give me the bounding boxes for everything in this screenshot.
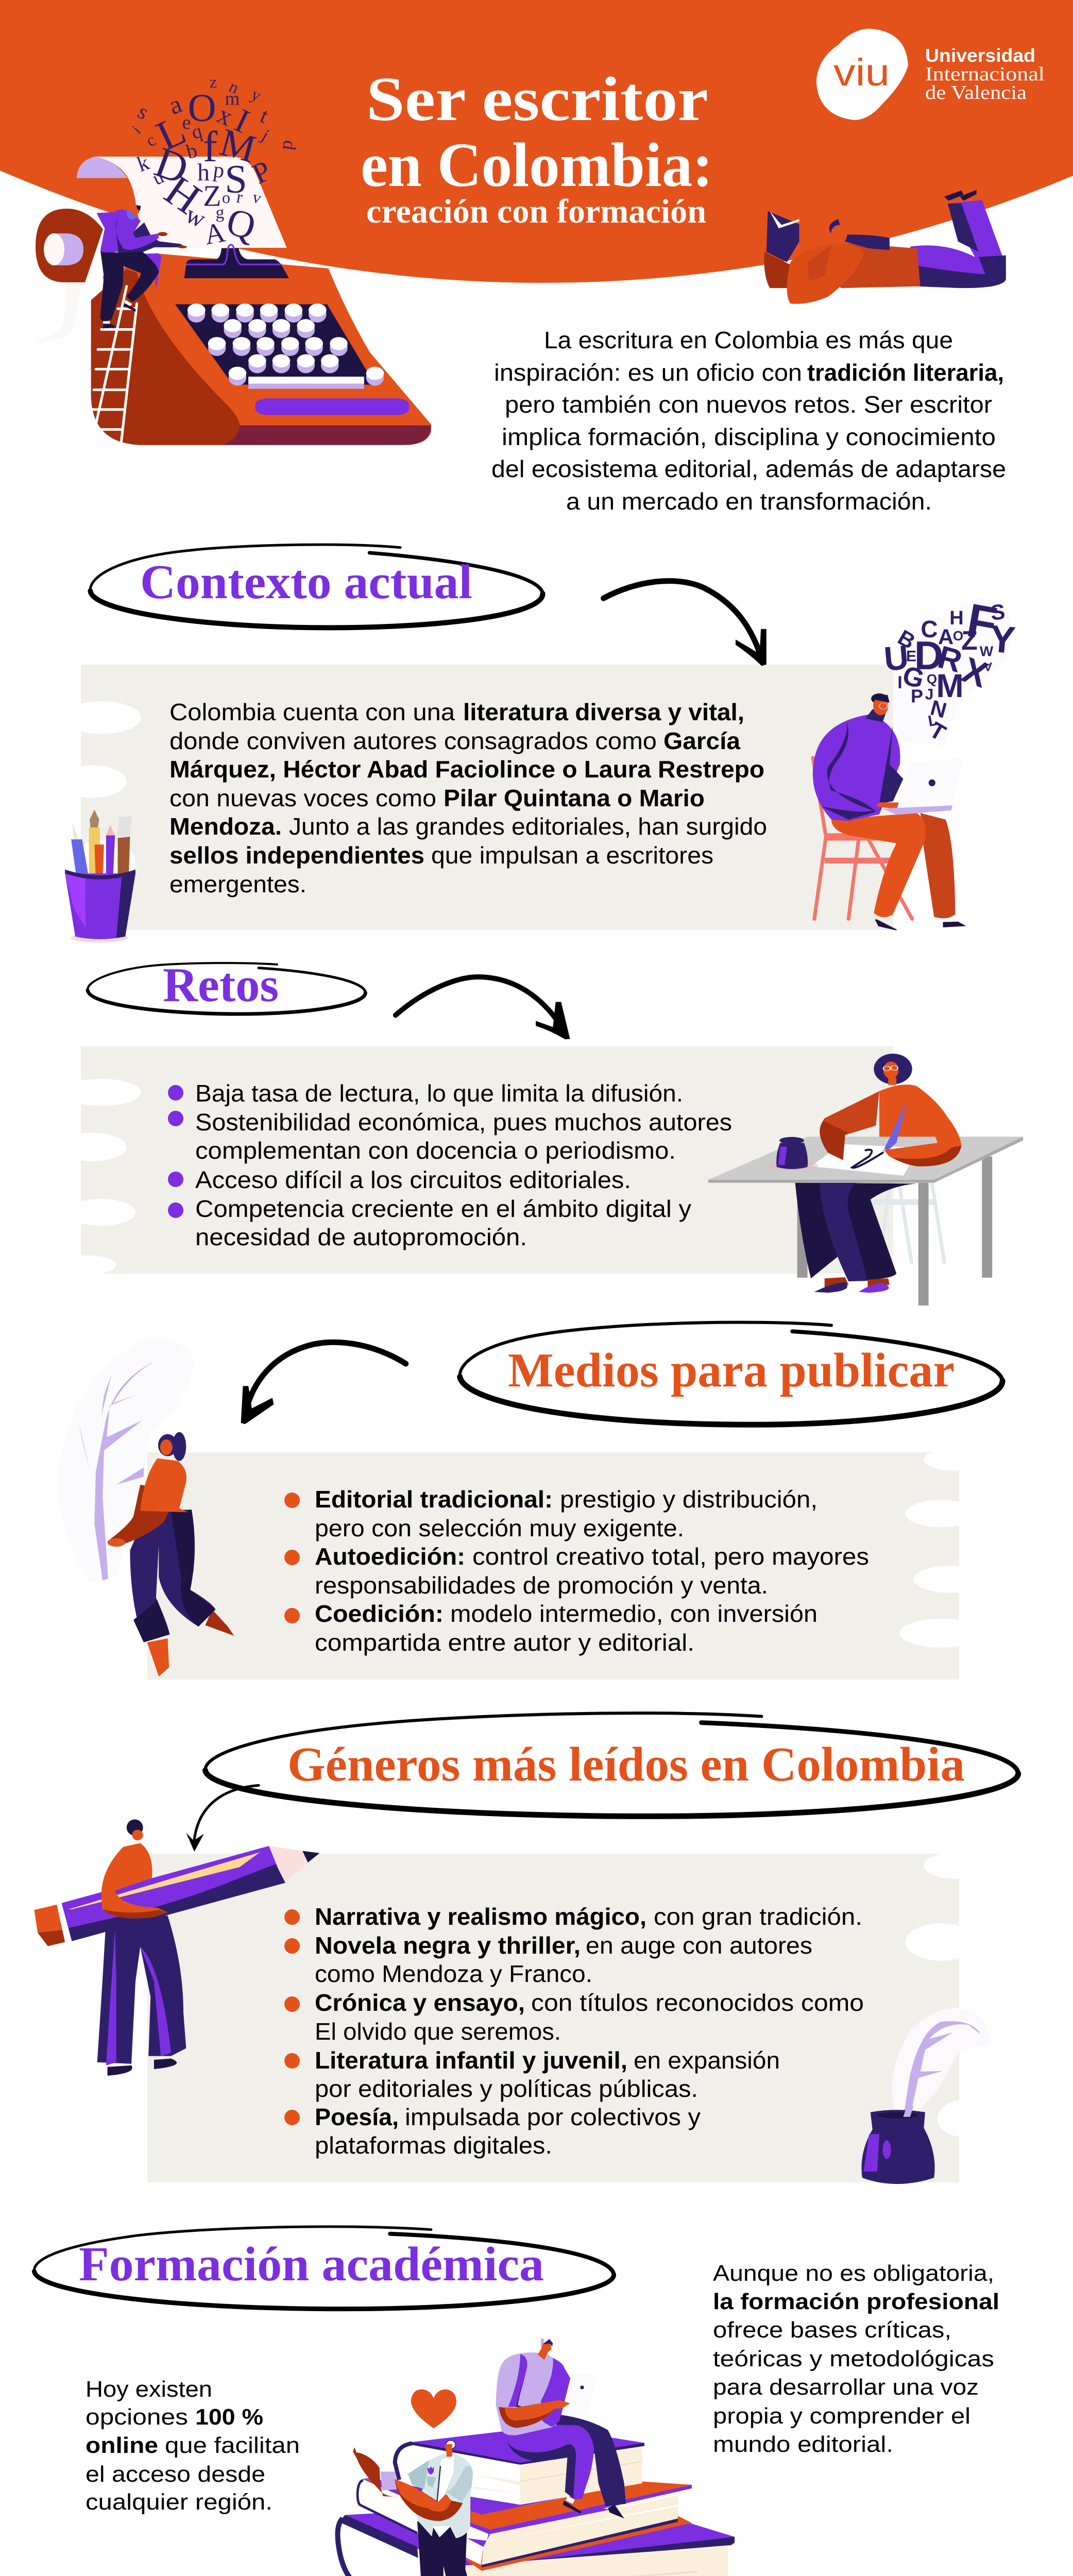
intro text: del ecosistema editorial, además de adaptarse	[491, 455, 1006, 482]
title	[361, 64, 713, 230]
text block: formación profesional: Aunque no es obligatoria,	[713, 2261, 994, 2286]
illustration: letters around laptop: E	[906, 648, 916, 665]
text block: contexto: sellos independientes	[169, 842, 424, 869]
illustration: letters around laptop: F	[963, 594, 1001, 651]
bullet list: géneros: Poesía,	[315, 2104, 399, 2130]
text block: contexto: donde conviven autores consagrados como	[169, 727, 657, 754]
illustration: letters around laptop: S	[990, 599, 1006, 625]
icon: heart	[411, 2389, 456, 2428]
text block: contexto: Pilar Quintana o Mario	[444, 785, 705, 811]
text block: formación profesional: propia y comprender el	[713, 2403, 970, 2429]
illustration: flying letters: w	[181, 199, 210, 233]
illustration: flying letters: y	[248, 85, 264, 106]
heading: medios para publicar: Medios para publicar	[508, 1344, 955, 1397]
illustration: letters around laptop: I	[897, 673, 902, 692]
logo: Universidad	[925, 45, 1035, 66]
illustration: letters around laptop: D	[914, 633, 943, 678]
bullet list: medios: modelo intermedio, con inversión	[450, 1600, 817, 1627]
bullet list: medios: responsabilidades de promoción y venta.	[315, 1572, 768, 1599]
intro text: a un mercado en transformación.	[566, 488, 932, 515]
illustration: flying letters: i	[129, 122, 144, 138]
bullet list: medios: pero con selección muy exigente.	[315, 1515, 684, 1541]
bullet list: retos: Baja tasa de lectura, lo que limita la difusión.	[195, 1080, 683, 1107]
bullet list: géneros: El olvido que seremos.	[315, 2018, 561, 2045]
text block: formación profesional: para desarrollar una voz	[713, 2375, 979, 2400]
roller	[36, 209, 103, 282]
illustration: flying letters: v	[251, 188, 263, 207]
text block: contexto: Colombia cuenta con una	[169, 699, 455, 725]
illustration: flying letters: f	[203, 123, 218, 171]
illustration: flying letters: L	[149, 106, 193, 160]
text block: contexto: García	[663, 727, 740, 754]
illustration: man with laptop	[813, 598, 1013, 930]
illustration: letters around laptop: P	[911, 685, 923, 707]
bullet list: retos: necesidad de autopromoción.	[195, 1224, 527, 1250]
title: Ser escritor	[366, 64, 708, 134]
illustration: flying letters: n	[226, 77, 242, 98]
text block: 100% online: 100 %	[195, 2404, 263, 2430]
logo: viu	[833, 51, 890, 94]
arrow: medios	[241, 1342, 406, 1424]
heading: géneros: Géneros más leídos en Colombia	[287, 1738, 965, 1791]
bullet list: medios	[284, 1486, 869, 1656]
illustration: flying letters: s	[133, 100, 153, 125]
illustration: flying letters: b	[184, 139, 199, 163]
bullet list: géneros: con gran tradición.	[654, 1903, 862, 1930]
logo: de Valencia	[925, 82, 1027, 104]
illustration: letters around laptop: U	[882, 638, 910, 678]
illustration: flying letters: a	[165, 89, 185, 120]
text block: formación profesional: ofrece bases críticas,	[713, 2317, 951, 2343]
illustration: letters around laptop: R	[934, 639, 966, 680]
illustration: flying letters: d	[279, 139, 300, 151]
illustration: flying letters: M	[215, 121, 261, 171]
bullet list: medios: Editorial tradicional:	[315, 1486, 553, 1513]
bullet list: medios: compartida entre autor y editorial.	[315, 1629, 694, 1656]
text block: 100% online: online	[86, 2433, 158, 2458]
heading: contexto actual	[90, 545, 542, 628]
intro text: inspiración: es un oficio con	[494, 359, 802, 386]
bullet list: géneros: con títulos reconocidos como	[531, 1989, 864, 2016]
bullet list: medios: control creativo total, pero mayores	[472, 1543, 869, 1570]
title: en Colombia:	[361, 130, 713, 200]
logo: Internacional	[925, 63, 1045, 85]
bullet list: medios: prestigio y distribución,	[560, 1486, 817, 1513]
illustration: flying letters: O	[188, 87, 216, 130]
bullet list: géneros: plataformas digitales.	[315, 2132, 552, 2159]
illustration: letters around laptop: W	[980, 643, 994, 659]
text block: 100% online: Hoy existen	[86, 2377, 212, 2402]
illustration: letters around laptop: A	[938, 624, 953, 649]
illustration: flying letters: A	[202, 216, 228, 250]
illustration: letters around laptop: N	[928, 695, 949, 723]
illustration: flying letters: I	[229, 101, 255, 141]
top book	[395, 2427, 644, 2505]
illustration: letters around laptop: B	[894, 625, 919, 654]
illustration: letters around laptop: L	[927, 711, 939, 730]
text block: 100% online: que facilitan	[165, 2433, 300, 2458]
illustration: flying letters: e	[182, 112, 191, 133]
panel: medios para publicar	[147, 1448, 989, 1685]
illustration: flying letters: r	[235, 188, 244, 207]
arrow: géneros	[186, 1785, 259, 1852]
illustration: flying letters: m	[225, 89, 240, 109]
illustration: flying letters: q	[189, 120, 205, 144]
bullet list: géneros: por editoriales y políticas públicas.	[315, 2075, 698, 2102]
illustration: flying letters: z	[210, 73, 217, 92]
text block: 100% online: cualquier región.	[86, 2489, 272, 2515]
bullet list: géneros: impulsada por colectivos y	[405, 2104, 701, 2130]
heading: retos: Retos	[163, 958, 279, 1012]
body	[89, 253, 431, 455]
illustration: flying letters: g	[215, 203, 225, 223]
arrow: retos	[396, 977, 570, 1039]
bullet list: géneros	[284, 1903, 864, 2159]
illustration: flying letters: t	[257, 104, 272, 128]
bullet list: retos: Acceso difícil a los circuitos editoriales.	[195, 1166, 631, 1193]
bullet list: retos	[168, 1080, 732, 1250]
bullet list: géneros: en expansión	[634, 2047, 780, 2074]
illustration: man standing with book	[353, 2441, 474, 2576]
text block: contexto	[169, 699, 767, 897]
panel: géneros	[147, 1850, 992, 2184]
illustration: letters around laptop: G	[899, 660, 927, 694]
illustration: flying letters: H	[156, 166, 210, 224]
text block: 100% online: opciones	[86, 2404, 188, 2430]
title: creación con formación	[366, 193, 706, 230]
icon: pencil cup	[65, 809, 135, 943]
text block: 100% online	[86, 2377, 300, 2515]
illustration: woman reading	[764, 190, 1006, 304]
illustration: man on ladder	[96, 205, 187, 328]
bullet list: géneros: Literatura infantil y juvenil,	[315, 2047, 627, 2074]
heading: formación académica	[34, 2227, 614, 2309]
heading: géneros	[205, 1713, 1018, 1816]
header background	[0, 0, 1073, 283]
bullet list: retos: complementan con docencia o periodismo.	[195, 1137, 676, 1164]
illustration: flying letters: S	[225, 157, 247, 201]
illustration: typewriter	[35, 157, 431, 455]
heading: retos	[88, 958, 365, 1014]
bullet list: géneros: Novela negra y thriller,	[315, 1932, 581, 1959]
text block: contexto: emergentes.	[169, 871, 306, 897]
illustration: flying letters: o	[222, 188, 230, 207]
intro text: pero también con nuevos retos. Ser escritor	[505, 391, 992, 418]
text block: contexto: Márquez, Héctor Abad Faciolince o Laura Restrepo	[169, 756, 764, 783]
arrow: contexto	[604, 581, 767, 666]
text block: formación profesional	[713, 2261, 999, 2457]
illustration: letters around laptop: M	[936, 667, 964, 704]
illustration: flying letters: u	[149, 166, 167, 190]
bullet list: géneros: en auge con autores	[586, 1932, 812, 1959]
illustration: flying letters	[129, 73, 300, 250]
intro text: tradición literaria,	[807, 359, 1004, 386]
bullet list: medios: Autoedición:	[315, 1543, 465, 1570]
text block: contexto: Junto a las grandes editoriales, han surgido	[289, 813, 767, 840]
text block: contexto: con nuevas voces como	[169, 785, 436, 811]
illustration: letters around laptop: C	[921, 616, 938, 642]
panel: contexto actual	[58, 665, 893, 930]
illustration: letters around laptop: T	[925, 717, 950, 746]
illustration: flying letters: D	[149, 138, 194, 194]
illustration: flying letters: k	[134, 151, 152, 177]
heading: medios para publicar	[460, 1323, 1002, 1425]
illustration: letters around laptop: V	[984, 660, 992, 674]
paper and carriage	[77, 157, 289, 278]
text block: formación profesional: mundo editorial.	[713, 2432, 893, 2457]
illustration: letters around laptop: J	[925, 686, 933, 703]
logo	[816, 29, 1045, 120]
middle book	[357, 2478, 692, 2571]
text block: contexto: Mendoza.	[169, 813, 282, 840]
bullet list: retos: Sostenibilidad económica, pues muchos autores	[195, 1109, 732, 1136]
illustration: letters around laptop: X	[957, 649, 994, 696]
illustration: woman writing at desk	[708, 1054, 1023, 1306]
heading: contexto actual: Contexto actual	[140, 555, 472, 609]
bullet list: retos: Competencia creciente en el ámbito digital y	[195, 1195, 691, 1222]
illustration: man sitting on books	[496, 2338, 626, 2518]
bullet list: géneros: como Mendoza y Franco.	[315, 1960, 592, 1987]
intro text	[491, 327, 1006, 515]
illustration: flying letters: c	[143, 130, 159, 151]
illustration: letters around laptop	[882, 594, 1017, 746]
illustration: flying letters: Q	[222, 200, 260, 248]
hanging paper sheet	[35, 227, 103, 343]
bullet list: géneros: Narrativa y realismo mágico,	[315, 1903, 646, 1930]
text block: 100% online: el acceso desde	[86, 2462, 265, 2487]
text block: contexto: que impulsan a escritores	[431, 842, 713, 869]
icon: inkwell with feather	[861, 2008, 989, 2184]
bullet list: medios: Coedición:	[315, 1600, 444, 1627]
bullet list: géneros: Crónica y ensayo,	[315, 1989, 525, 2016]
illustration: letters around laptop: O	[953, 628, 963, 643]
illustration: stack of books	[338, 2427, 738, 2576]
illustration: letters around laptop: Q	[927, 671, 937, 687]
text block: formación profesional: teóricas y metodológicas	[713, 2346, 994, 2371]
illustration: flying letters: P	[248, 155, 276, 191]
illustration: letters around laptop: H	[949, 607, 964, 629]
illustration: letters around laptop: Y	[988, 617, 1017, 662]
illustration: flying letters: x	[213, 100, 237, 132]
heading: formación académica: Formación académica	[79, 2238, 544, 2291]
illustration: figure with pencil	[34, 1819, 319, 2076]
panel: retos	[58, 1046, 893, 1274]
text block: contexto: literatura diversa y vital,	[463, 699, 744, 725]
bottom book	[338, 2504, 738, 2576]
illustration: flying letters: p	[212, 158, 226, 183]
intro text: La escritura en Colombia es más que	[544, 327, 953, 353]
illustration: flying letters: h	[197, 159, 210, 187]
illustration: flying letters: Z	[203, 179, 222, 212]
intro text: implica formación, disciplina y conocimiento	[502, 423, 996, 450]
illustration: letters around laptop: Z	[961, 626, 978, 656]
text block: formación profesional: la formación profesional	[713, 2289, 999, 2314]
illustration: woman with feather	[58, 1338, 234, 1676]
illustration: flying letters: j	[258, 126, 272, 145]
